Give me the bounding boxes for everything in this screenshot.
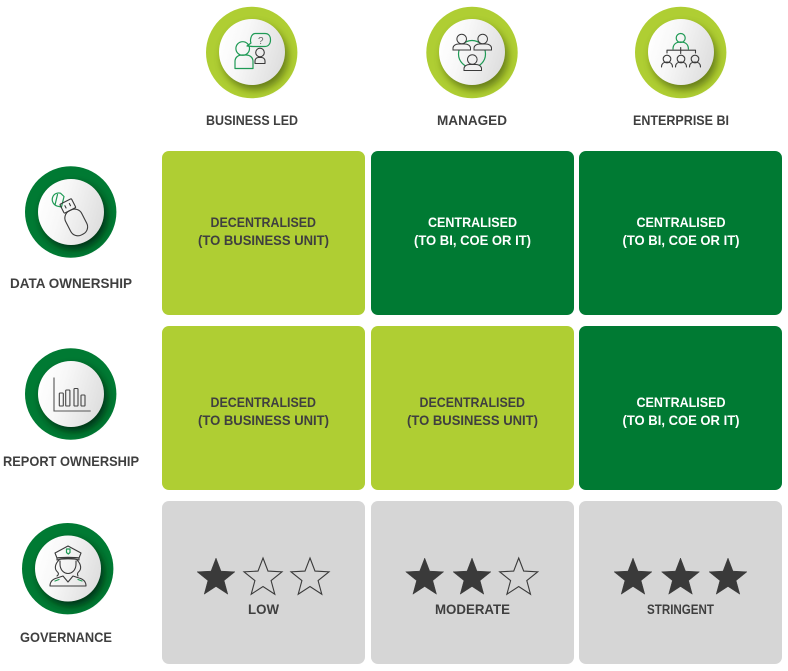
panel: report ownership, enterprise bi <box>579 326 782 490</box>
panel: governance stringent: STRINGENT <box>647 601 714 617</box>
icon: three connected people <box>426 7 518 98</box>
icon: bar chart <box>25 348 116 440</box>
icon: person asking a question: ? <box>258 36 264 47</box>
column header: managed <box>426 7 518 128</box>
row header: governance <box>20 523 113 645</box>
panel: data ownership, enterprise bi <box>579 151 782 315</box>
panel: report ownership, enterprise bi: CENTRALISED <box>636 394 726 410</box>
icon: police officer <box>22 523 113 614</box>
panel: report ownership, managed: DECENTRALISED <box>420 394 525 410</box>
heading: managed: MANAGED <box>437 112 507 128</box>
panel: report ownership, business led: (TO BUSINESS UNIT) <box>198 412 329 428</box>
row header: report ownership <box>3 348 139 469</box>
panel: data ownership, managed <box>371 151 574 315</box>
panel: data ownership, enterprise bi: CENTRALISED <box>636 214 726 230</box>
panel: data ownership, business led: DECENTRALISED <box>210 214 316 230</box>
row header: data ownership <box>10 166 132 291</box>
panel: governance stringent <box>579 501 782 664</box>
heading: governance: GOVERNANCE <box>20 629 112 645</box>
column header: enterprise bi <box>633 7 729 128</box>
panel: data ownership, managed: CENTRALISED <box>428 214 517 230</box>
panel: report ownership, managed <box>371 326 574 490</box>
panel: report ownership, managed: (TO BUSINESS UNIT) <box>407 412 538 428</box>
panel: data ownership, managed: (TO BI, COE OR IT) <box>414 232 531 248</box>
icon: organisation hierarchy <box>635 7 726 98</box>
panel: report ownership, enterprise bi: (TO BI, COE OR IT) <box>622 412 740 428</box>
panel: report ownership, business led <box>162 326 365 490</box>
heading: data ownership: DATA OWNERSHIP <box>10 275 132 291</box>
icon: usb stick <box>25 166 116 258</box>
heading: business led: BUSINESS LED <box>206 112 298 128</box>
panel: data ownership, business led: (TO BUSINESS UNIT) <box>198 232 329 248</box>
heading: enterprise bi: ENTERPRISE BI <box>633 112 729 128</box>
heading: report ownership: REPORT OWNERSHIP <box>3 453 139 469</box>
panel: report ownership, business led: DECENTRALISED <box>210 394 316 410</box>
panel: data ownership, business led <box>162 151 365 315</box>
panel: governance low <box>162 501 365 664</box>
panel: governance low: LOW <box>248 601 280 617</box>
panel: governance moderate <box>371 501 574 664</box>
panel: data ownership, enterprise bi: (TO BI, COE OR IT) <box>622 232 740 248</box>
panel: governance moderate: MODERATE <box>435 601 510 617</box>
column header: business led <box>206 7 298 128</box>
